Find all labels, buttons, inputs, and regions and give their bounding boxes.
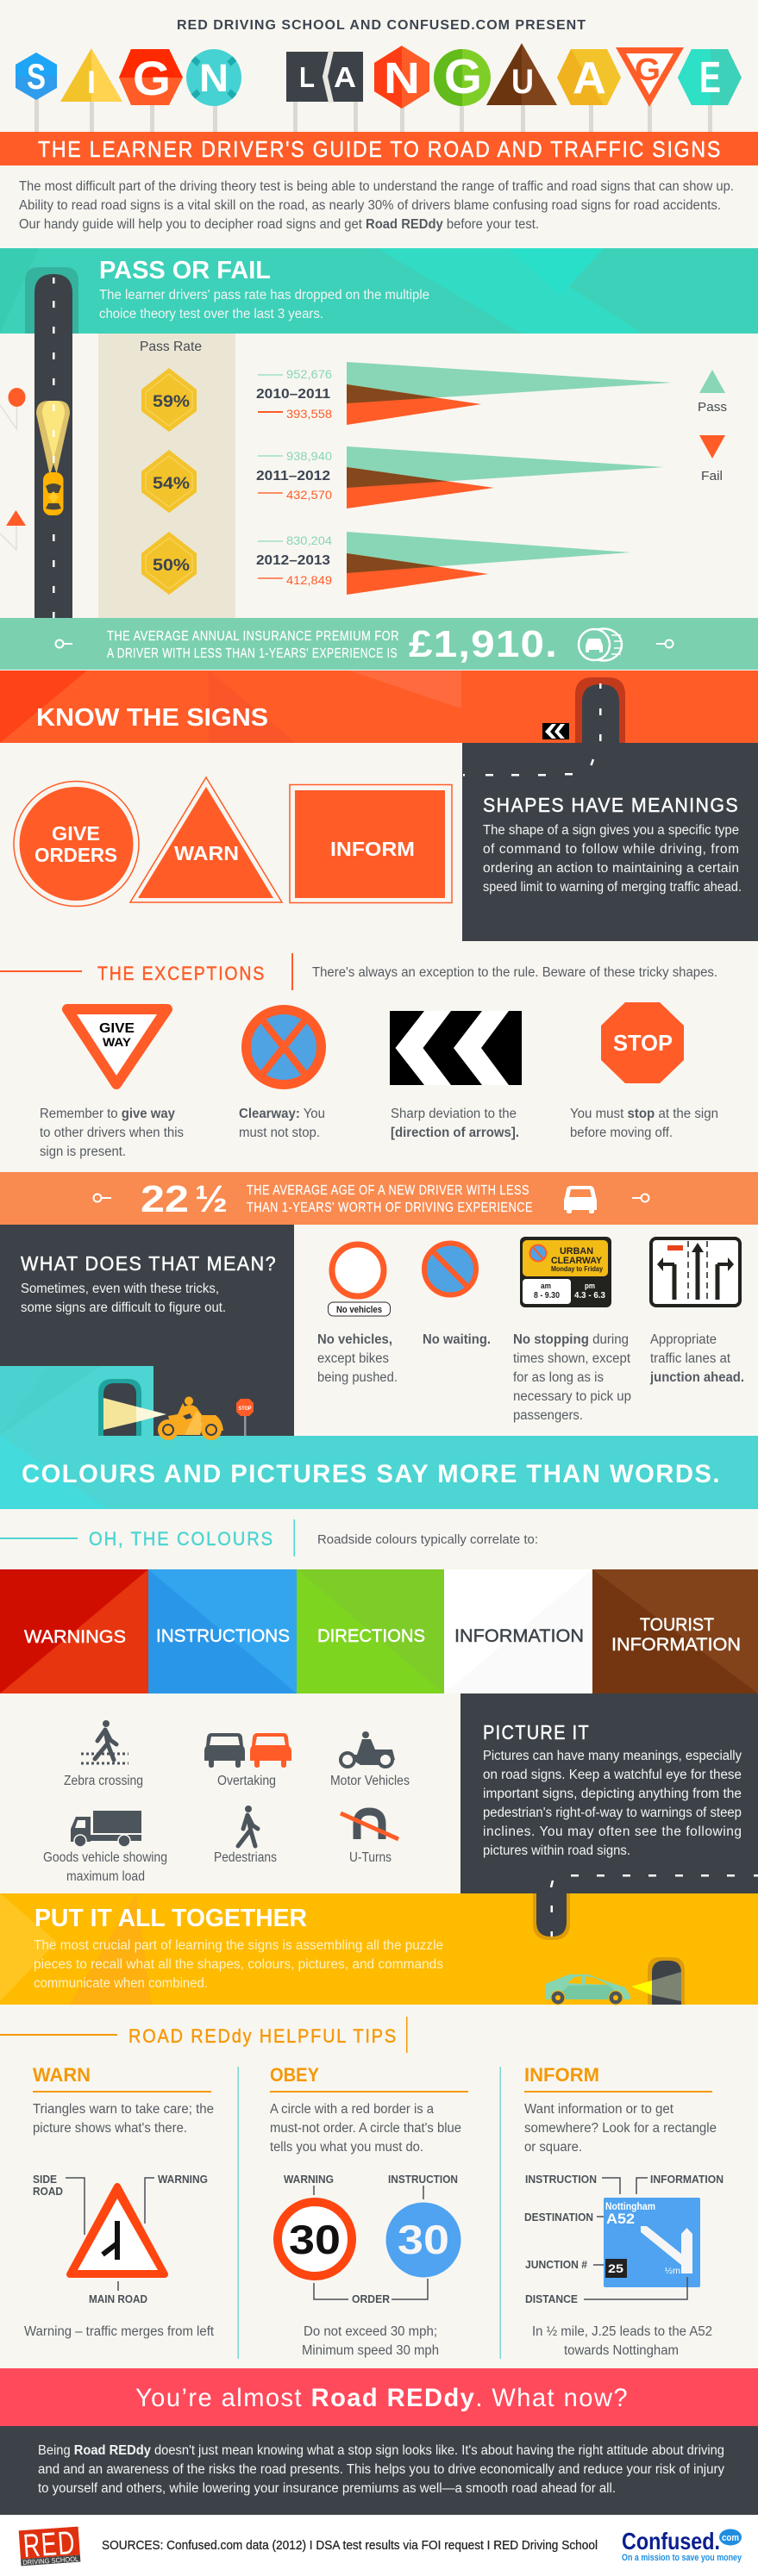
sign letter N circle: N — [199, 56, 229, 100]
panel: closing paragraph — [0, 2426, 758, 2515]
picture it description: inclines. You may often see the following — [483, 1824, 742, 1839]
sign: no waiting: No waiting. — [423, 1332, 491, 1347]
sign letter I — [60, 48, 122, 102]
footer — [0, 2515, 758, 2576]
roadside sign: triangle — [0, 510, 26, 550]
diagram: warning triangle: SIDE — [33, 2173, 57, 2186]
icon: small stop sign — [236, 1399, 254, 1436]
logo: confused.com: com — [722, 2533, 739, 2543]
put it all together text — [34, 1938, 443, 1991]
picture it description: important signs, depicting anything from the — [483, 1787, 742, 1801]
callout: average age: THAN 1-YEARS' WORTH OF DRIVING EXPERIENCE — [247, 1201, 533, 1215]
sign: urban clearway: URBAN — [560, 1246, 593, 1257]
exception: stop — [570, 1002, 718, 1140]
sign: give orders circle: ORDERS — [34, 844, 117, 866]
callout: insurance premium — [0, 618, 758, 670]
exception: clearway — [239, 1005, 326, 1140]
tip: inform: somewhere? Look for a rectangle — [524, 2121, 717, 2136]
row: 2012-2013: 412,849 — [286, 573, 332, 587]
intro paragraph: The most difficult part of the driving theory test is being able to understand the range of traffic and road signs that can show up. — [19, 179, 734, 194]
sign letter N circle — [186, 49, 241, 106]
icon: goods vehicle: maximum load — [66, 1869, 145, 1884]
teal banner: colours and pictures: COLOURS AND PICTURES SAY MORE THAN WORDS. — [22, 1460, 721, 1488]
sign: warn triangle — [130, 777, 282, 902]
sign: no vehicles: No vehicles — [336, 1305, 382, 1315]
exception: clearway: Clearway: You — [239, 1107, 325, 1121]
pass rate column — [98, 334, 235, 618]
sign letter N octagon: N — [384, 53, 420, 103]
put it all together text: The most crucial part of learning the signs is assembling all the puzzle — [34, 1938, 443, 1953]
banner: almost road reddy: You’re almost Road REDdy. What now? — [135, 2384, 629, 2412]
icon: car coin — [579, 629, 622, 660]
sign: no vehicles — [317, 1244, 398, 1385]
diagram: warning triangle — [33, 2173, 208, 2305]
intro paragraph: Ability to read road signs is a vital skill on the road, as nearly 30% of drivers blame confusing road signs for road accidents. — [19, 198, 721, 213]
tip: obey: A circle with a red border is a — [270, 2102, 434, 2117]
exception: sharp deviation — [390, 1011, 522, 1140]
icon: zebra crossing: Zebra crossing — [64, 1774, 143, 1788]
panel: what does that mean — [0, 1225, 294, 1436]
sign: urban clearway: Monday to Friday — [551, 1265, 603, 1273]
sign letter S — [16, 53, 57, 100]
car top view — [43, 472, 64, 515]
callout: insurance premium: A DRIVER WITH LESS THAN 1-YEARS' EXPERIENCE IS — [107, 646, 398, 661]
banner: almost road reddy — [0, 2368, 758, 2426]
sign: urban clearway: pm — [585, 1282, 595, 1290]
diagram: direction sign: ½m — [665, 2267, 680, 2276]
sign letter N octagon — [374, 46, 429, 109]
sign letters L A — [286, 51, 363, 103]
diagram: speed signs: 30 — [289, 2217, 341, 2262]
intro paragraph — [19, 179, 734, 232]
headlight beam — [36, 401, 70, 472]
row: 2012-2013: 2012–2013 — [256, 553, 330, 568]
sign: junction lanes — [649, 1238, 744, 1385]
tip: obey: OBEY — [270, 2064, 319, 2086]
row: 2011-2012: 54% — [153, 475, 190, 493]
sign: junction lanes: junction ahead. — [649, 1370, 744, 1385]
sign: urban clearway: 8 - 9.30 — [534, 1291, 560, 1300]
sign: urban clearway: No stopping during — [513, 1332, 629, 1347]
sign letter G circle — [434, 49, 491, 106]
road end — [533, 1887, 570, 1940]
sign letter S: S — [27, 56, 46, 97]
logo: confused.com: Confused. — [622, 2528, 720, 2554]
exception: clearway: must not stop. — [239, 1126, 320, 1140]
header: presenters line: RED DRIVING SCHOOL AND CONFUSED.COM PRESENT — [177, 18, 586, 33]
heading: the exceptions — [0, 953, 717, 990]
diagram: direction sign: DESTINATION — [524, 2211, 593, 2224]
panel: shapes have meanings — [462, 677, 758, 941]
exception: give way: sign is present. — [40, 1145, 126, 1159]
diagram: speed signs: ORDER — [352, 2292, 391, 2305]
sign: inform square: INFORM — [330, 838, 415, 860]
icon: motor vehicles: Motor Vehicles — [330, 1774, 410, 1788]
diagram: direction sign: A52 — [606, 2211, 635, 2227]
diagram: warning triangle: MAIN ROAD — [89, 2292, 147, 2305]
picture it description — [483, 1749, 742, 1858]
callout: insurance premium: £1,910. — [409, 623, 558, 665]
tip: inform: towards Nottingham — [564, 2343, 679, 2358]
diagram: direction sign: INSTRUCTION — [525, 2173, 597, 2186]
heading: oh, the colours: OH, THE COLOURS — [89, 1528, 274, 1550]
tip: obey: Minimum speed 30 mph — [302, 2343, 439, 2358]
row: 2011-2012 — [141, 446, 664, 513]
tip: inform: or square. — [524, 2140, 582, 2155]
tip: warn: Warning – traffic merges from left — [24, 2324, 215, 2339]
pass or fail description: choice theory test over the last 3 years. — [99, 307, 323, 321]
pass rate chart — [140, 340, 727, 595]
shapes description: ordering an action to maintaining a certain — [483, 861, 739, 876]
icon: overtaking cars: Overtaking — [217, 1774, 276, 1788]
exception: stop: You must stop at the sign — [570, 1107, 718, 1121]
colour panel: tourist information: TOURIST — [640, 1615, 714, 1635]
colour panel: information — [444, 1569, 592, 1693]
callout: average age: ½ — [195, 1178, 228, 1220]
sources: SOURCES: Confused.com data (2012) I DSA test results via FOI request I RED Driving School — [102, 2539, 598, 2553]
icon: motorcycle — [158, 1396, 223, 1440]
callout: average age: 22 — [141, 1178, 189, 1220]
sign letter E hexagon — [678, 49, 742, 105]
row: 2012-2013: 830,204 — [286, 533, 332, 547]
sign letter A hexagon — [557, 49, 621, 105]
sign letters L A: A — [334, 61, 356, 93]
diagram: speed signs: WARNING — [284, 2173, 334, 2186]
icon: pedestrians: Pedestrians — [214, 1850, 277, 1865]
pass or fail description: The learner drivers' pass rate has dropped on the multiple — [99, 288, 429, 303]
diagram: speed signs: INSTRUCTION — [388, 2173, 458, 2186]
legend — [698, 370, 727, 483]
legend: Pass — [698, 400, 727, 415]
picture it description: pictures within road signs. — [483, 1843, 630, 1858]
tip: inform — [524, 2064, 724, 2358]
sign letter A hexagon: A — [573, 53, 606, 103]
colour panel: tourist information: INFORMATION — [611, 1635, 741, 1655]
heading: the exceptions: There's always an exception to the rule. Beware of these tricky shapes. — [312, 965, 717, 980]
tip: warn: Triangles warn to take care; the — [33, 2102, 214, 2117]
panel: closing paragraph: and and an awareness of the risks the road presents. This helps you to drive economically and reduce your risk of injury — [38, 2462, 724, 2477]
tip: inform: INFORM — [524, 2064, 599, 2086]
sign: urban clearway: necessary to pick up — [513, 1389, 631, 1404]
panel: what does that mean: Sometimes, even with these tricks, — [21, 1282, 219, 1296]
callout: insurance premium: THE AVERAGE ANNUAL INSURANCE PREMIUM FOR — [107, 629, 399, 644]
heading: road reddy helpful tips: ROAD REDdy HELPFUL TIPS — [128, 2025, 398, 2047]
exception: give way — [40, 1009, 184, 1159]
row: 2010-2011: 2010–2011 — [256, 387, 330, 402]
sign: urban clearway: CLEARWAY — [551, 1256, 603, 1266]
sign letter U triangle — [486, 43, 557, 105]
tip: inform: Want information or to get — [524, 2102, 674, 2117]
sign: give orders circle — [14, 781, 139, 907]
panel: what does that mean: some signs are difficult to figure out. — [21, 1300, 226, 1315]
icon: u-turns — [341, 1812, 398, 1865]
title: SIGN LANGUAGE road signs — [16, 43, 742, 133]
colour panel: tourist information — [592, 1569, 758, 1693]
icon: overtaking cars — [204, 1733, 291, 1788]
pass rate label: Pass Rate — [140, 340, 202, 354]
diagram: direction sign: INFORMATION — [650, 2173, 724, 2186]
sign: junction lanes: Appropriate — [650, 1332, 717, 1347]
icon: zebra crossing — [64, 1720, 143, 1788]
sign letter G yield — [616, 47, 684, 107]
tip: warn — [24, 2064, 215, 2339]
row: 2012-2013: 50% — [153, 557, 190, 575]
teal banner: colours and pictures — [0, 1366, 758, 1509]
shapes description: speed limit to warning of merging traffic ahead. — [483, 880, 742, 895]
sign letter G yield: G — [635, 52, 661, 87]
sign letter U triangle: U — [511, 63, 534, 101]
icon: pedestrians — [214, 1806, 277, 1865]
panel: pass or fail header — [0, 248, 758, 334]
sign letters L A: L — [299, 61, 315, 93]
row: 2010-2011 — [141, 362, 672, 432]
heading: put it all together: PUT IT ALL TOGETHER — [34, 1905, 307, 1932]
colour panel: warnings: WARNINGS — [24, 1627, 126, 1647]
exception: give way: Remember to give way — [40, 1107, 175, 1121]
icon: u-turns: U-Turns — [349, 1850, 392, 1865]
heading: oh, the colours — [0, 1519, 538, 1556]
diagram: direction sign — [524, 2173, 724, 2305]
heading: the exceptions: THE EXCEPTIONS — [97, 963, 266, 984]
sign letter E hexagon: E — [699, 53, 721, 102]
tunnel with beam — [631, 1957, 685, 2005]
colour panel: instructions — [148, 1569, 297, 1693]
diagram: speed signs — [278, 2173, 460, 2305]
colour panel: information: INFORMATION — [454, 1626, 584, 1646]
sign: urban clearway: times shown, except — [513, 1351, 631, 1366]
heading: oh, the colours: Roadside colours typically correlate to: — [317, 1533, 538, 1547]
shapes description — [483, 823, 742, 895]
exception: give way: WAY — [103, 1035, 132, 1049]
shapes description: The shape of a sign gives you a specific type — [483, 823, 739, 838]
logo: RED driving school: DRIVING SCHOOL — [22, 2555, 79, 2567]
put it all together text: communicate when combined. — [34, 1976, 208, 1991]
row: 2011-2012: 432,570 — [286, 488, 332, 502]
sign letter G circle: G — [444, 49, 482, 104]
diagram: warning triangle: ROAD — [33, 2185, 63, 2198]
tip: obey — [270, 2064, 468, 2358]
picture it description: on road signs. Keep a watchful eye for these — [483, 1768, 742, 1782]
roadside sign: circle — [0, 388, 26, 429]
row: 2010-2011: 393,558 — [286, 407, 332, 421]
colour panel: warnings — [0, 1569, 148, 1693]
road into panel — [463, 677, 625, 776]
sign: urban clearway: am — [541, 1282, 551, 1290]
road with car and headlight — [25, 267, 78, 618]
diagram: direction sign: DISTANCE — [525, 2292, 578, 2305]
row: 2010-2011: 59% — [153, 393, 190, 411]
icon: small stop sign: STOP — [238, 1407, 252, 1412]
sign letter I: I — [87, 65, 96, 100]
legend: Fail — [701, 469, 723, 483]
heading: know the signs: KNOW THE SIGNS — [36, 704, 268, 732]
exception: stop: before moving off. — [570, 1126, 673, 1140]
sign: no waiting — [423, 1243, 491, 1347]
icon: chevron sign — [542, 723, 569, 739]
icon: green car — [545, 1974, 630, 2005]
row: 2011-2012: 938,940 — [286, 449, 332, 463]
exception: sharp deviation: [direction of arrows]. — [391, 1126, 519, 1140]
sign: no vehicles: No vehicles, — [317, 1332, 392, 1347]
icon: goods vehicle: Goods vehicle showing — [43, 1850, 167, 1865]
heading: pass or fail: PASS OR FAIL — [99, 257, 271, 284]
tip: warn: WARN — [33, 2064, 91, 2086]
colour panel: directions: DIRECTIONS — [317, 1626, 425, 1646]
exception: stop: STOP — [613, 1030, 673, 1056]
sign: warn triangle: WARN — [174, 842, 239, 864]
icon: car front — [564, 1186, 597, 1213]
pass or fail description — [99, 288, 429, 321]
panel: closing paragraph: Being Road REDdy doesn't just mean knowing what a stop sign looks like. It's about having the right attitude about driving — [38, 2443, 724, 2458]
icon: goods vehicle — [43, 1811, 167, 1884]
sign: urban clearway: for as long as is — [513, 1370, 604, 1385]
diagram: direction sign: JUNCTION # — [525, 2258, 588, 2271]
sign: junction lanes: traffic lanes at — [650, 1351, 731, 1366]
icon: motor vehicles — [330, 1731, 410, 1788]
shapes description: of command to follow while driving, from — [483, 842, 739, 857]
tip: inform: In ½ mile, J.25 leads to the A52 — [532, 2324, 712, 2339]
exception: give way: to other drivers when this — [40, 1126, 184, 1140]
row: 2010-2011: 952,676 — [286, 367, 332, 381]
logo: RED driving school — [19, 2525, 80, 2567]
row: 2011-2012: 2011–2012 — [256, 469, 330, 483]
callout: average age — [0, 1172, 758, 1225]
tip: obey: tells you what you must do. — [270, 2140, 423, 2155]
sign: urban clearway — [513, 1237, 631, 1423]
sign: give orders circle: GIVE — [52, 822, 100, 845]
logo: RED driving school: RED — [22, 2525, 77, 2565]
put it all together text: pieces to recall what all the shapes, colours, pictures, and commands — [34, 1957, 443, 1972]
sign letter G hexagon: G — [133, 51, 171, 105]
panel: closing paragraph: to yourself and others, while lowering your insurance premiums as well—a smooth road ahead for all. — [38, 2481, 616, 2496]
diagram: direction sign: Nottingham — [605, 2200, 655, 2212]
panel: what does that mean: WHAT DOES THAT MEAN? — [21, 1252, 277, 1275]
diagram: warning triangle: WARNING — [158, 2173, 208, 2186]
panel: picture it — [460, 1693, 758, 1893]
tip: obey: must-not order. A circle that's blue — [270, 2121, 461, 2136]
intro paragraph: Our handy guide will help you to decipher road signs and get Road REDdy before your test. — [19, 217, 539, 232]
panel: put it all together — [0, 1887, 758, 2005]
exception: sharp deviation: Sharp deviation to the — [391, 1107, 517, 1121]
callout: average age: THE AVERAGE AGE OF A NEW DRIVER WITH LESS — [247, 1183, 529, 1198]
sign: no vehicles: except bikes — [317, 1351, 389, 1366]
tunnel with motorcycle beam — [98, 1379, 166, 1436]
heading: shapes have meanings: SHAPES HAVE MEANINGS — [483, 794, 739, 816]
sign: urban clearway: 4.3 - 6.3 — [574, 1291, 605, 1300]
panel: picture it: PICTURE IT — [483, 1721, 590, 1743]
colour panel: directions — [297, 1569, 444, 1693]
picture it description: Pictures can have many meanings, especially — [483, 1749, 742, 1763]
picture it description: pedestrian's right-of-way to warnings of steep — [483, 1806, 742, 1820]
sign: urban clearway: passengers. — [513, 1408, 583, 1423]
sign: no vehicles: being pushed. — [317, 1370, 398, 1385]
exception: give way: GIVE — [99, 1021, 135, 1036]
panel: know the signs band — [0, 671, 758, 743]
tip: obey: Do not exceed 30 mph; — [304, 2324, 437, 2339]
diagram: speed signs: 30 — [398, 2217, 449, 2262]
colour panel: instructions: INSTRUCTIONS — [156, 1626, 290, 1646]
tip: warn: picture shows what's there. — [33, 2121, 187, 2136]
sign: inform square — [290, 784, 452, 903]
diagram: direction sign: 25 — [608, 2261, 623, 2275]
row: 2012-2013 — [141, 532, 630, 595]
sign letter G hexagon — [119, 49, 183, 105]
